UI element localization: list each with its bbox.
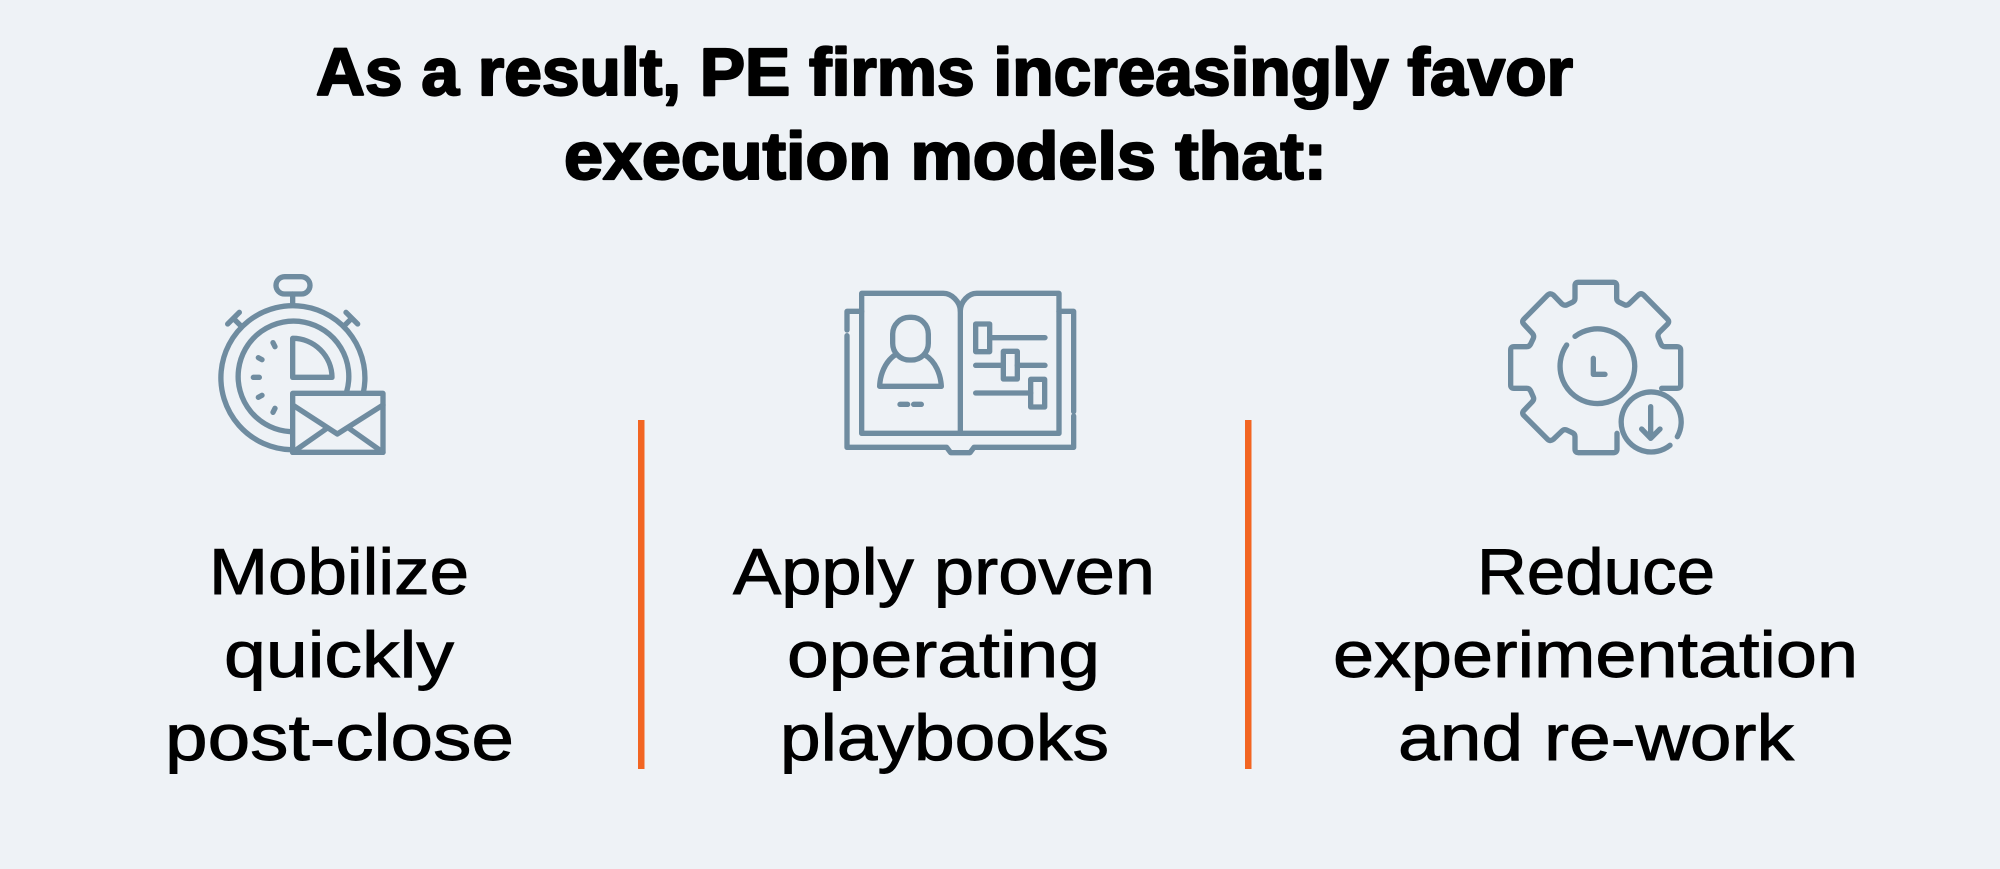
icon: stopwatch with envelope <box>221 277 383 452</box>
panel: proven playbooks <box>733 293 1155 774</box>
text: apply proven operating playbooks <box>733 535 1155 774</box>
text: mobilize quickly post-close: post-close <box>165 701 514 774</box>
title <box>316 35 1573 194</box>
text: mobilize quickly post-close: Mobilize <box>209 535 469 608</box>
title: execution models that: <box>564 119 1327 194</box>
text: reduce experimentation and re-work <box>1333 535 1858 774</box>
panel: reduce experimentation <box>1333 282 1858 774</box>
text: reduce experimentation and re-work: Reduce <box>1477 535 1715 608</box>
text: reduce experimentation and re-work: and re-work <box>1398 701 1795 774</box>
title: As a result, PE firms increasingly favor <box>316 35 1573 110</box>
text: reduce experimentation and re-work: experimentation <box>1333 618 1858 691</box>
text: apply proven operating playbooks: operating <box>787 618 1100 691</box>
text: mobilize quickly post-close <box>165 535 514 774</box>
icon: gear with clock and download arrow <box>1511 282 1681 453</box>
text: apply proven operating playbooks: playbooks <box>780 701 1109 774</box>
divider: right orange line <box>1245 420 1252 769</box>
text: apply proven operating playbooks: Apply proven <box>733 535 1155 608</box>
divider: left orange line <box>638 420 644 769</box>
panel: mobilize quickly <box>165 277 514 774</box>
icon: open book with profile and sliders <box>847 293 1074 453</box>
text: mobilize quickly post-close: quickly <box>224 618 455 691</box>
